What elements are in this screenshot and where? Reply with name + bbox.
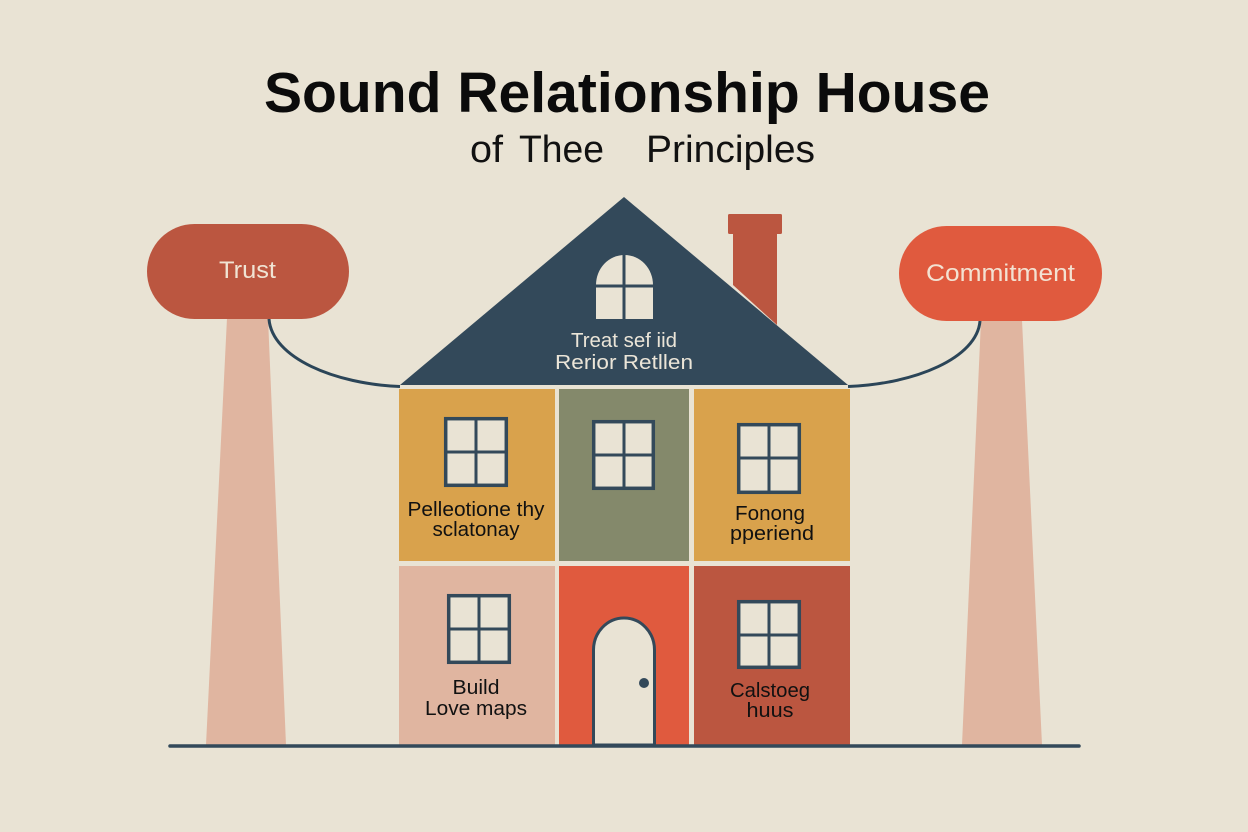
label: pperiend — [730, 523, 814, 545]
label: Pelleotione thy — [408, 499, 544, 521]
subtitle: Principles — [646, 129, 815, 171]
label — [425, 677, 527, 720]
label: Calstoeg — [730, 680, 810, 702]
left pillar — [206, 318, 286, 745]
icon: window — [738, 424, 800, 493]
subtitle: of — [470, 129, 503, 171]
commitment pill: Commitment — [926, 260, 1075, 287]
ground line — [170, 744, 1079, 748]
panel: upper right — [694, 389, 850, 561]
trust pill: Trust — [219, 257, 276, 284]
subtitle: Thee — [519, 129, 604, 171]
roof label: Treat sef iid — [571, 330, 677, 352]
label — [730, 503, 814, 545]
right connector curve — [848, 321, 980, 386]
trust pill — [147, 224, 349, 319]
label: Love maps — [425, 698, 527, 720]
icon: door — [594, 618, 654, 745]
chimney — [728, 214, 782, 325]
label: Fonong — [735, 503, 805, 525]
roof label — [555, 330, 693, 374]
label: sclatonay — [432, 519, 520, 541]
panel: lower left — [399, 566, 555, 745]
attic window — [595, 254, 654, 320]
roof — [400, 197, 848, 385]
icon: window — [593, 421, 654, 489]
panel: lower right — [694, 566, 850, 745]
icon: window — [445, 418, 507, 486]
right pillar — [962, 320, 1042, 745]
icon: window — [448, 595, 510, 663]
label: Build — [452, 677, 500, 699]
subtitle — [470, 129, 815, 171]
left connector curve — [269, 319, 400, 386]
roof label: Rerior Retllen — [555, 352, 693, 374]
panel: door section — [559, 566, 689, 745]
panel: upper left — [399, 389, 555, 561]
panel: upper middle — [559, 389, 689, 561]
label: huus — [746, 700, 794, 722]
commitment pill — [899, 226, 1102, 321]
label — [408, 499, 544, 541]
title: Sound Relationship House — [264, 61, 990, 125]
label — [730, 680, 810, 722]
icon: window — [738, 601, 800, 668]
